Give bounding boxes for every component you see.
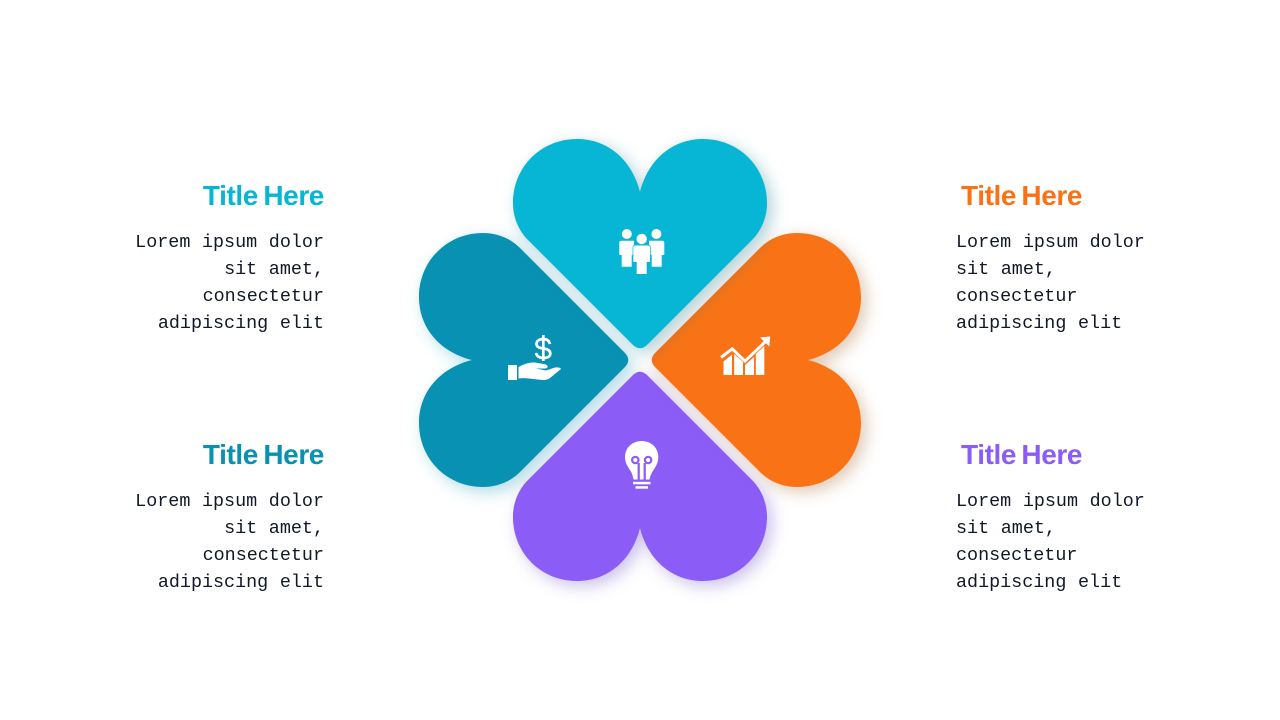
title: top left: Title Here [203,180,324,211]
icon: hand with dollar [508,335,561,380]
text: bottom left: Lorem ipsum dolor sit amet, consectetur adipiscing elit [135,491,324,593]
heart: orange right [652,233,861,487]
text: top left: Lorem ipsum dolor sit amet, consectetur adipiscing elit [135,232,324,334]
icon: light bulb [625,441,658,489]
heart: cyan top [513,139,767,348]
text: top right: Lorem ipsum dolor sit amet, consectetur adipiscing elit [956,232,1145,334]
title: bottom right: Title Here [961,439,1082,470]
icon: growth chart [721,336,770,375]
title: top right: Title Here [961,180,1082,211]
title: bottom left: Title Here [203,439,324,470]
heart: teal left [419,233,628,487]
text: bottom right: Lorem ipsum dolor sit amet, consectetur adipiscing elit [956,491,1145,593]
icon: people [619,229,664,274]
heart: purple bottom [513,372,767,581]
